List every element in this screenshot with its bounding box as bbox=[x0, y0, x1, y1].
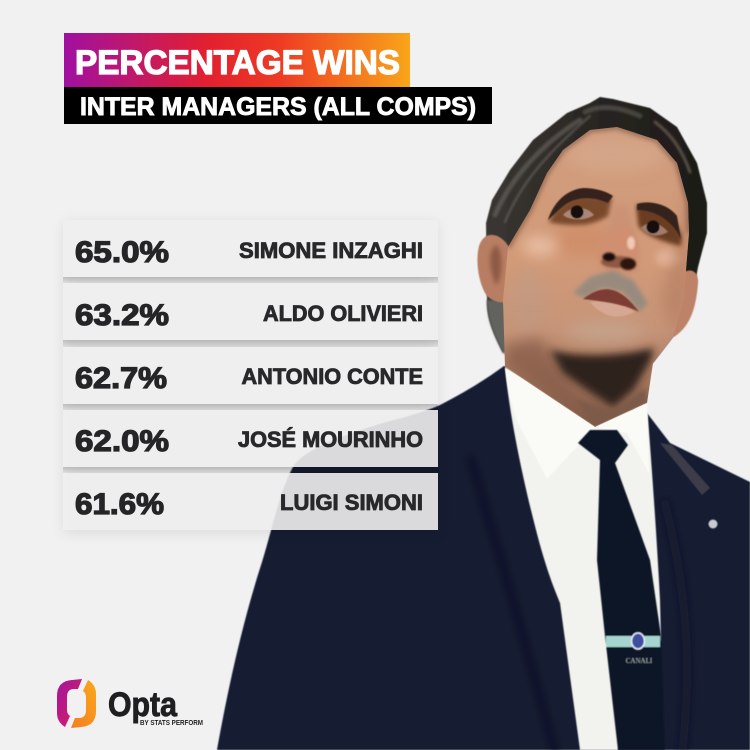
left eyebrow bbox=[548, 188, 613, 220]
left eye socket bbox=[549, 196, 612, 225]
row 3: 62.7% bbox=[75, 362, 167, 395]
row 4 bbox=[63, 410, 438, 473]
left ear inner bbox=[490, 245, 501, 285]
forehead glow bbox=[573, 143, 657, 170]
hairline shadow bbox=[508, 127, 689, 247]
left cheek highlight bbox=[522, 236, 558, 256]
nose bridge bbox=[600, 205, 636, 250]
left stubble tint bbox=[512, 268, 544, 332]
subtitle text: INTER MANAGERS (ALL COMPS) bbox=[80, 93, 476, 121]
face and neck bbox=[495, 120, 695, 430]
row 5: 61.6% bbox=[75, 488, 164, 521]
under-eye warm tone bbox=[559, 226, 604, 254]
philtrum bbox=[612, 272, 614, 284]
row 1: 65.0% bbox=[75, 236, 169, 269]
lips bbox=[583, 289, 639, 312]
shirt bbox=[505, 368, 661, 750]
collar bbox=[505, 367, 649, 479]
lower hair tuft bbox=[487, 300, 512, 355]
row 4: 62.0% bbox=[75, 425, 169, 458]
tie label: CANALI bbox=[626, 657, 653, 665]
nostrils bbox=[601, 252, 636, 270]
subtitle black bar bbox=[64, 87, 492, 124]
right lapel sheen bbox=[660, 443, 710, 495]
chin pale bbox=[567, 320, 643, 344]
table soft shadow bbox=[63, 222, 438, 534]
right ear bbox=[668, 270, 698, 337]
suit jacket bbox=[217, 366, 750, 750]
lower lip bbox=[590, 301, 634, 317]
panel: ranking table bbox=[63, 220, 438, 534]
suit folds bbox=[470, 456, 687, 750]
row 4: JOSÉ MOURINHO bbox=[238, 427, 423, 452]
lower neck bbox=[575, 388, 648, 428]
tie bbox=[578, 430, 665, 750]
skin base bbox=[495, 120, 695, 430]
wordmark: Opta bbox=[108, 686, 178, 724]
right cheek highlight bbox=[656, 249, 680, 267]
nose highlight bbox=[627, 236, 635, 250]
tie crest bbox=[632, 633, 644, 649]
tie stripe bbox=[606, 636, 660, 647]
moustache stubble bbox=[573, 270, 648, 312]
back hair bbox=[486, 97, 707, 363]
manager photo illustration bbox=[217, 97, 750, 750]
left neck shade bbox=[504, 334, 574, 407]
row 3: ANTONIO CONTE bbox=[242, 364, 423, 389]
lapel pin bbox=[708, 520, 718, 528]
by stats perform: BY STATS PERFORM bbox=[140, 720, 203, 727]
row 2: 63.2% bbox=[75, 299, 169, 332]
right eyebrow bbox=[637, 202, 681, 240]
panel: title bbox=[64, 33, 492, 124]
row 5 bbox=[63, 473, 438, 530]
left ear bbox=[477, 235, 511, 302]
row 3 bbox=[63, 347, 438, 410]
beard shadow bbox=[550, 348, 654, 407]
logo: Opta bbox=[57, 679, 203, 728]
icon: Opta mark bbox=[57, 679, 96, 728]
hair streaks bbox=[495, 107, 690, 222]
right eye socket bbox=[636, 204, 682, 246]
row 1 bbox=[63, 220, 438, 283]
right face shade bbox=[662, 212, 689, 326]
nose bbox=[597, 225, 639, 275]
title gradient bar bbox=[64, 33, 410, 87]
left eye bbox=[563, 206, 594, 220]
right eye bbox=[641, 220, 668, 235]
row 2: ALDO OLIVIERI bbox=[263, 301, 423, 326]
row 1: SIMONE INZAGHI bbox=[239, 238, 423, 263]
title text: PERCENTAGE WINS bbox=[75, 44, 400, 82]
row 5: LUIGI SIMONI bbox=[280, 490, 423, 515]
row 2 bbox=[63, 283, 438, 347]
